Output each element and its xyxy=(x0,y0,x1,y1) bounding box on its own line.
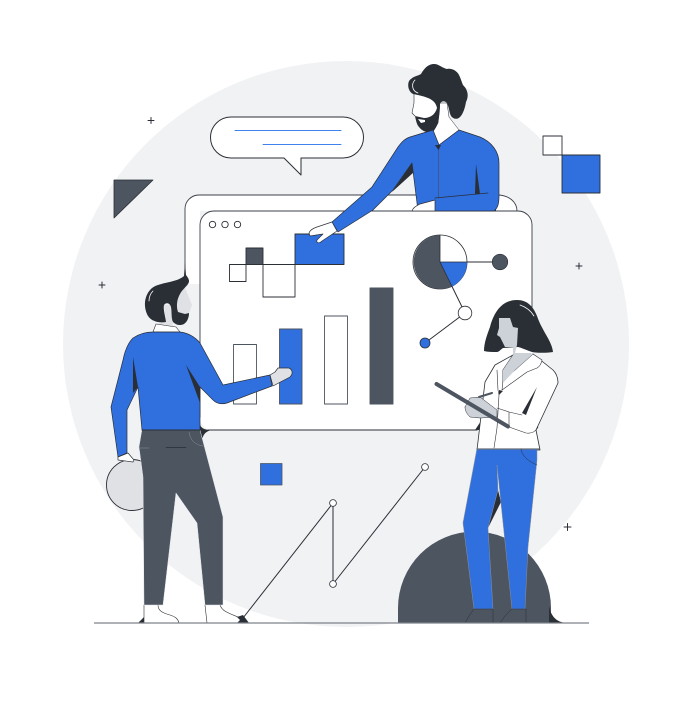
face xyxy=(412,92,438,119)
torso wedge xyxy=(366,163,496,211)
bar chart xyxy=(234,288,393,404)
leg shadow xyxy=(488,490,501,528)
blue sweater xyxy=(332,130,499,232)
pen xyxy=(479,393,492,397)
dark node xyxy=(492,254,508,270)
decorative squares top right xyxy=(543,136,600,193)
pie chart with connector nodes xyxy=(413,235,508,348)
holding hand xyxy=(118,453,134,462)
hair highlight xyxy=(413,80,418,93)
trousers xyxy=(139,430,223,605)
pointing hand xyxy=(270,368,292,386)
hair and beard xyxy=(408,64,468,132)
collar xyxy=(153,324,180,332)
lapel shadow xyxy=(499,390,503,395)
far hand xyxy=(412,200,435,211)
main panel xyxy=(200,211,532,430)
blue sweater xyxy=(111,332,272,457)
small blue square xyxy=(260,464,282,485)
shoe shadows xyxy=(138,615,249,623)
writing hand xyxy=(465,397,497,418)
sleeve shadow xyxy=(522,387,537,415)
triangle decoration xyxy=(114,180,153,218)
blue node xyxy=(420,338,430,348)
step chart xyxy=(230,234,344,297)
speech bubble xyxy=(210,117,364,175)
line chart xyxy=(243,464,428,618)
blue trousers xyxy=(463,449,537,609)
near hand xyxy=(309,222,337,243)
hair and beard xyxy=(145,262,189,325)
white node xyxy=(458,306,472,320)
woman figure xyxy=(436,300,558,623)
plus signs xyxy=(99,118,582,530)
top man figure xyxy=(309,64,499,243)
tablet xyxy=(436,384,508,426)
jacket xyxy=(477,354,558,450)
shoes xyxy=(144,605,240,623)
face xyxy=(175,285,192,317)
face and neck xyxy=(497,318,532,383)
left man figure xyxy=(106,262,292,623)
hair xyxy=(484,300,553,353)
back panel xyxy=(185,195,517,284)
leg shadow xyxy=(162,469,176,508)
mouth xyxy=(418,119,425,123)
shoes xyxy=(465,609,526,623)
hair highlight xyxy=(520,305,534,316)
dark semicircle mound xyxy=(398,532,566,623)
panel corner fillets xyxy=(197,415,485,442)
panel window dots xyxy=(209,221,241,228)
hip ball xyxy=(106,460,158,510)
ground line xyxy=(94,622,589,624)
sweater fold shadows xyxy=(133,357,200,403)
jacket collar xyxy=(502,354,542,390)
hair highlight xyxy=(149,291,153,301)
sweater details xyxy=(438,148,440,198)
neck xyxy=(433,103,459,145)
neck xyxy=(155,305,180,331)
background circle xyxy=(63,61,629,627)
